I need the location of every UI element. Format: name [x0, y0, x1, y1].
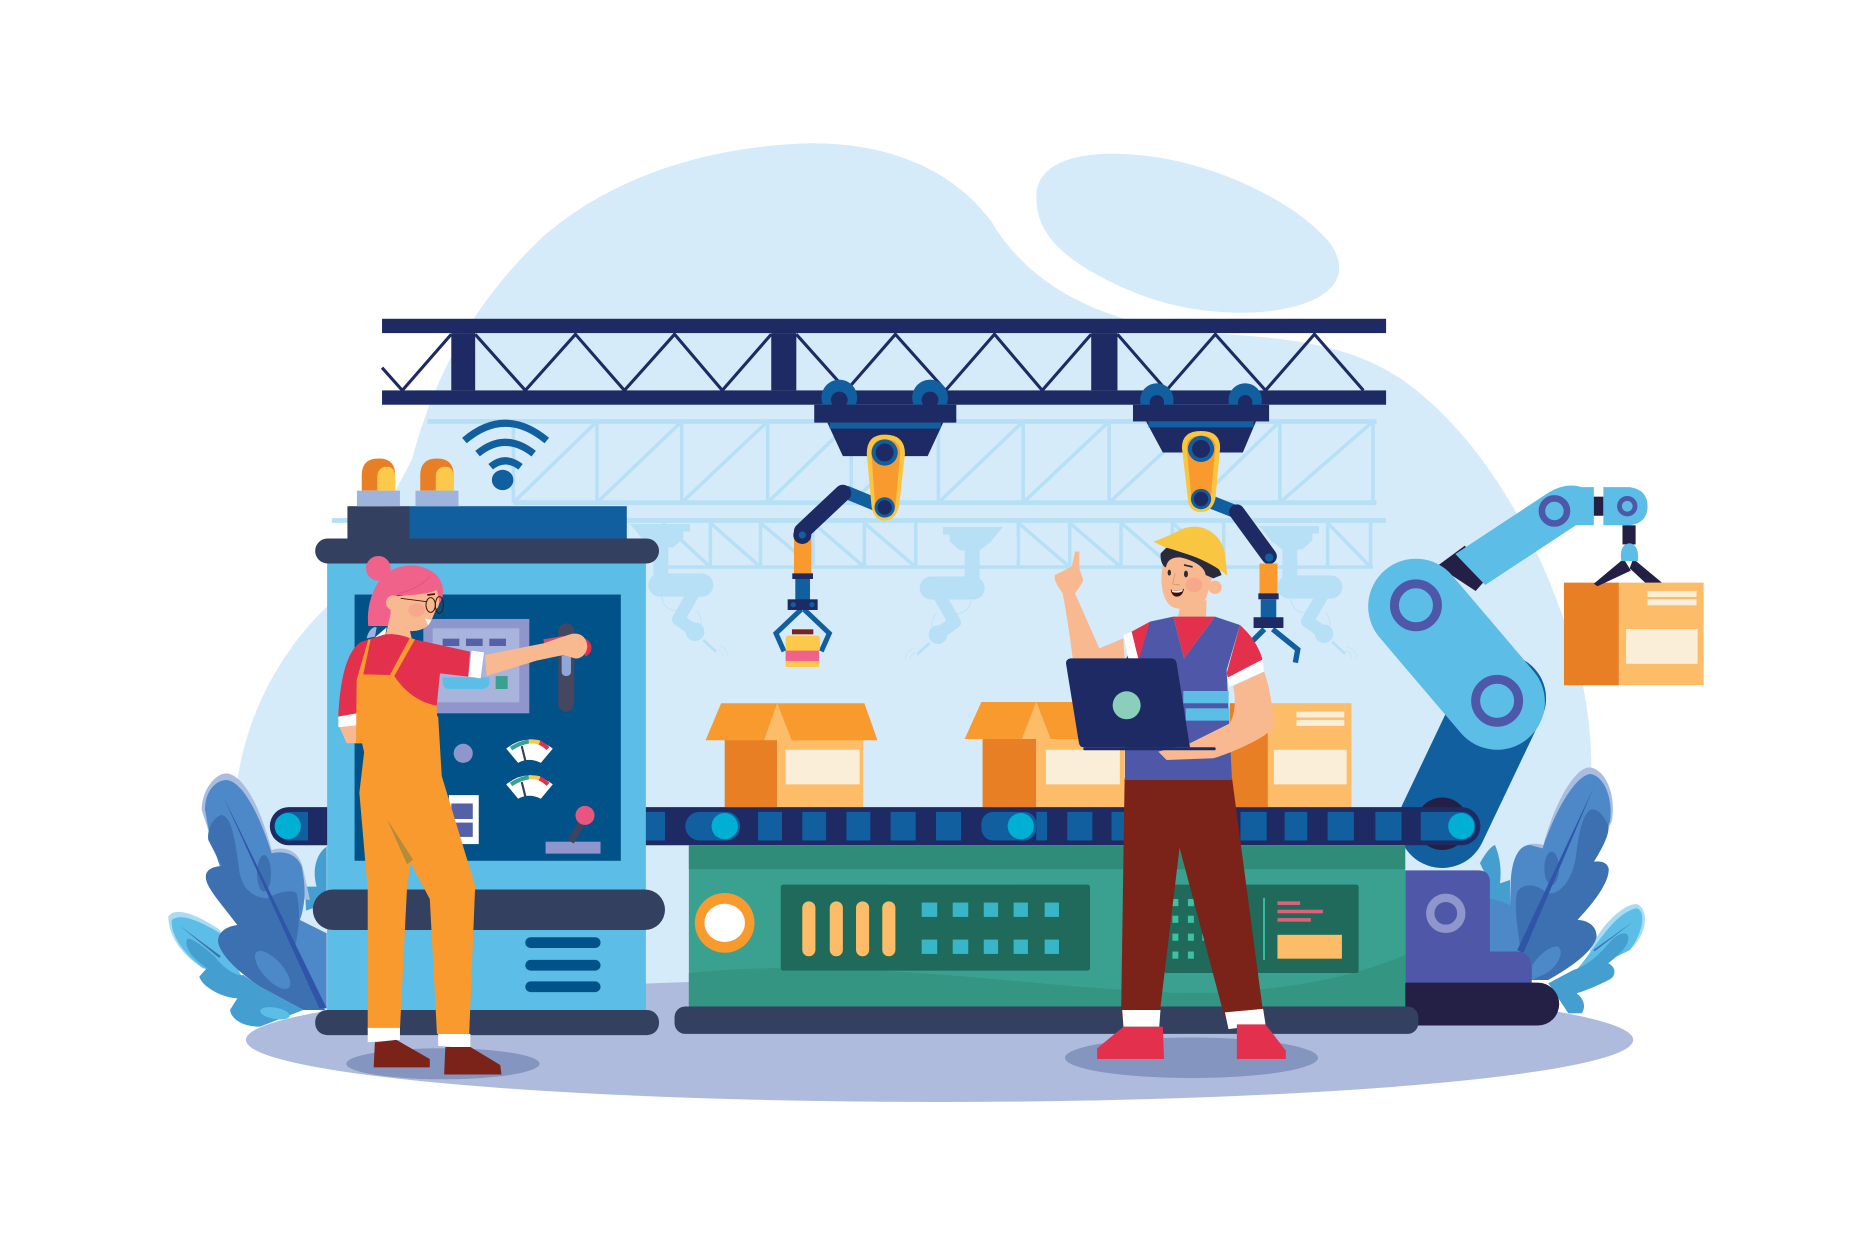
box 3 [1230, 703, 1351, 807]
orange ring indicator [695, 893, 755, 953]
ground ellipse [246, 978, 1633, 1102]
face [1161, 547, 1222, 609]
gripper 1 with part [776, 526, 829, 667]
base bar [315, 1010, 659, 1035]
dark leaf right [1490, 767, 1613, 980]
shirt cuffs [338, 651, 484, 727]
overall bib [356, 638, 438, 743]
upper arm [1394, 584, 1519, 722]
red shirt [338, 634, 470, 717]
plant: left foliage [168, 773, 327, 1027]
dark leaf left [202, 773, 327, 1010]
robot arm right [1385, 486, 1704, 1026]
gauge 1 [506, 740, 553, 763]
woman's arm [485, 634, 587, 676]
status light [454, 744, 473, 763]
upper body of man [1055, 527, 1273, 780]
icon: wifi [464, 423, 547, 490]
right control panel [1164, 885, 1359, 973]
crane truss [382, 319, 1386, 405]
green machine base bar [675, 1006, 1418, 1034]
cabinet body [327, 564, 646, 1017]
ghost robot arm 1 [630, 524, 727, 657]
small skin left arm [339, 724, 362, 743]
green machine [689, 845, 1405, 1008]
shoes [374, 1040, 501, 1074]
light leaf left [168, 912, 303, 1027]
plant: right foliage [1480, 767, 1645, 1013]
control panel face [355, 595, 621, 861]
gripper right [1594, 525, 1662, 586]
box 2 [965, 702, 1125, 807]
top bar [315, 538, 659, 564]
white switch box [449, 795, 479, 844]
red shoes [1097, 1024, 1286, 1059]
hard hat [1153, 527, 1227, 576]
mid bar [313, 889, 665, 930]
back leaf right [1480, 845, 1512, 957]
trouser cuffs [368, 1028, 470, 1048]
warning lamp right [415, 458, 458, 506]
light leaf right [1548, 904, 1645, 1013]
carriage 1 [814, 380, 956, 456]
gauge 2 [506, 775, 553, 799]
ghost truss background [332, 421, 1386, 567]
man with laptop [1055, 527, 1286, 1059]
box 1 [706, 703, 878, 807]
raised arm [1055, 552, 1125, 663]
lower arm [1442, 698, 1502, 824]
forearm [1437, 486, 1648, 591]
woman's face [375, 590, 443, 638]
gantry arm 2 [1133, 383, 1298, 663]
warning lamp left [357, 458, 400, 506]
hanging box [1564, 583, 1704, 685]
woman operator [338, 556, 592, 1074]
man's shadow [1065, 1037, 1318, 1078]
yellow link 1 [867, 435, 905, 521]
trousers [1121, 778, 1263, 1018]
overalls legs [356, 716, 475, 1034]
display unit and lever [423, 619, 574, 713]
ghost robot arm 3 [1259, 526, 1356, 659]
arm segments 2 [1203, 499, 1298, 663]
holding arm [1158, 672, 1273, 760]
conveyor belt [270, 807, 1480, 845]
laptop [1066, 658, 1216, 750]
control panel [781, 885, 1090, 971]
woman's shadow [346, 1048, 540, 1079]
gripped part [786, 629, 820, 667]
carriage 2 [1133, 383, 1269, 452]
hair [366, 556, 443, 638]
background blob: small cloud [1036, 154, 1339, 313]
cabinet top blocks [347, 506, 627, 540]
arm segments 1 [802, 492, 886, 531]
background blob: large sky shape [236, 143, 1591, 1015]
button behind hand [543, 636, 592, 657]
neck [1178, 600, 1207, 624]
yellow link 2 [1182, 431, 1220, 512]
robot base [1385, 870, 1559, 1026]
shirt and vest [1123, 617, 1264, 780]
back leaf left [305, 847, 327, 911]
gantry arm 1 [776, 380, 956, 667]
ghost robot arm 2 [906, 527, 1003, 660]
control cabinet [313, 423, 665, 1035]
boxes on conveyor [706, 702, 1351, 807]
vents [525, 937, 601, 992]
white cuffs [1122, 1009, 1266, 1029]
joystick [546, 806, 601, 854]
upper body [338, 556, 592, 743]
